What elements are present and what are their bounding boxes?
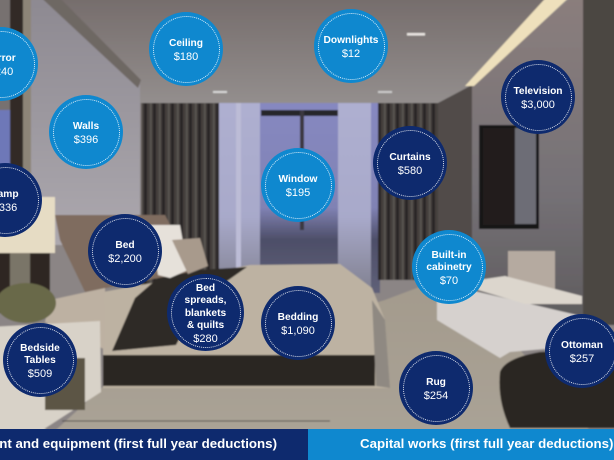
bubble: Walls: $396 (74, 134, 98, 146)
bubble: Walls: Walls (73, 121, 99, 132)
bubble: Bed spreads, blankets and quilts: & quilts (187, 320, 224, 331)
bubble: Window: $195 (286, 186, 310, 198)
bubble: Bed spreads, blankets and quilts: spreads, (185, 295, 226, 306)
bubble: Bed spreads, blankets and quilts: blankets (185, 308, 226, 319)
bubble: Ceiling (149, 12, 223, 86)
bubble: Lamp (0, 163, 42, 237)
floor (45, 280, 614, 460)
books (508, 251, 555, 295)
bubble: Television: $3,000 (521, 98, 555, 110)
shelf (478, 276, 582, 304)
bubble: Built-in cabinetry: $70 (440, 275, 458, 287)
bubble: Bed (88, 214, 162, 288)
bubble: Bed: $2,200 (108, 252, 142, 264)
legend bar: plant and equipment (0, 429, 308, 460)
bubble: Bed spreads, blankets and quilts: $280 (193, 333, 218, 345)
left mirror strip (0, 0, 10, 215)
bubble: Ottoman (545, 314, 614, 388)
bubble: Mirror (0, 27, 38, 101)
bubble: Downlights: $12 (342, 48, 360, 60)
cabinet (437, 290, 590, 358)
right wall (438, 85, 472, 305)
bedside table (0, 321, 101, 440)
bubble: Bedside Tables: Tables (24, 355, 56, 366)
bubble: Bedside Tables: $509 (28, 368, 52, 380)
bubble: Ottoman: $257 (570, 352, 594, 364)
bubble: Rug: Rug (426, 377, 446, 388)
left drape (141, 103, 219, 288)
bubble: Rug: $254 (424, 390, 448, 402)
bubble: Built-in cabinetry: Built-in (431, 250, 467, 261)
bubble: Window: Window (279, 174, 317, 185)
right drape (378, 103, 438, 280)
bubble: Bedside Tables (3, 323, 77, 397)
ceiling lights (213, 91, 227, 93)
bubble: Television: Television (513, 86, 563, 97)
bubble: Downlights (314, 9, 388, 83)
legend bar: capital works (308, 429, 614, 460)
bubble: Curtains (373, 126, 447, 200)
bubble: Bed: Bed (115, 240, 135, 251)
bed (103, 264, 390, 388)
television (479, 125, 539, 229)
left lamp and plant (0, 197, 55, 253)
bubble: Downlights: Downlights (324, 35, 378, 46)
bubble: Rug (399, 351, 473, 425)
bubble: Built-in cabinetry: cabinetry (426, 262, 472, 273)
bubble: Bedding: $1,090 (281, 324, 315, 336)
window (218, 103, 380, 293)
bubble: Ottoman: Ottoman (561, 340, 603, 351)
bubble: Bedding (261, 286, 335, 360)
bubble: Curtains: Curtains (389, 152, 431, 163)
legend bar: capital works: Capital works (first full year deductions) (360, 436, 613, 451)
bubble: Bed spreads, blankets and quilts (167, 274, 244, 351)
bubble: Television (501, 60, 575, 134)
bubble: Bedside Tables: Bedside (20, 343, 60, 354)
bubble: Ceiling: $180 (174, 50, 198, 62)
bubble: Walls (49, 95, 123, 169)
bubble: Bed spreads, blankets and quilts: Bed (196, 283, 215, 294)
pillows and headboard (55, 215, 190, 292)
ceiling (30, 0, 570, 103)
left wall (30, 0, 140, 245)
ottoman (499, 348, 614, 428)
bubble: Bedding: Bedding (278, 312, 318, 323)
bubble: Built-in cabinetry (412, 230, 486, 304)
bubble: Ceiling: Ceiling (169, 38, 203, 49)
bubble: Window (261, 148, 335, 222)
bubble: Curtains: $580 (398, 164, 422, 176)
